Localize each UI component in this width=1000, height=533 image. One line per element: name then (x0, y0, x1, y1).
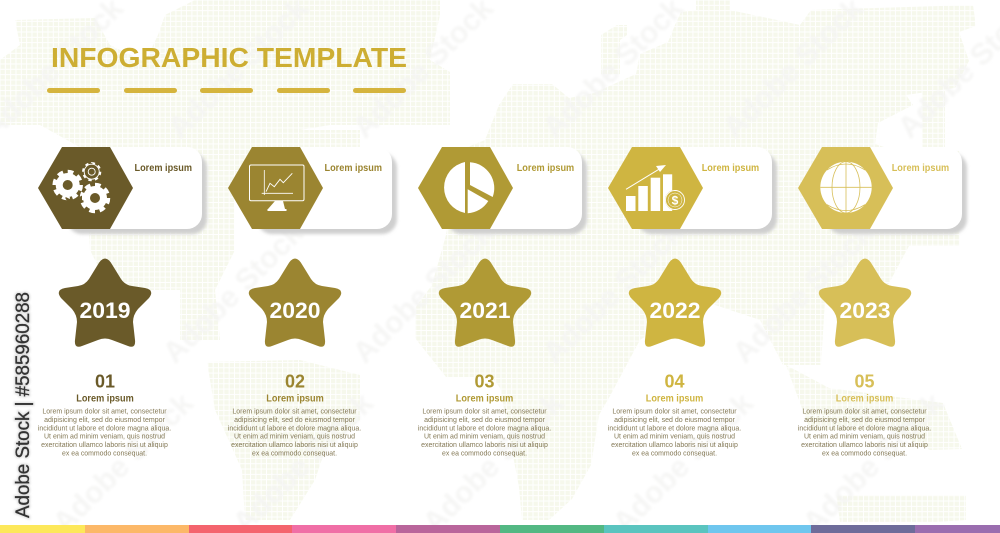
text block 03: Lorem ipsum dolor sit amet, consectetur (422, 406, 547, 416)
Adobe Stock vertical label: Adobe Stock | #585960288 (13, 292, 34, 518)
star: 2022 (629, 258, 721, 347)
text block 01: Lorem ipsum (76, 392, 134, 404)
diagonal watermarks: Adobe Stock (727, 217, 880, 370)
text block 04: exercitation ullamco laboris nisi ut aliquip (611, 440, 738, 449)
diagonal watermarks: Adobe Stock (157, 217, 310, 370)
icon: globe (820, 162, 872, 213)
text block 02: ex ea commodo consequat. (252, 448, 337, 458)
text block 03: Lorem ipsum (456, 392, 513, 404)
text block 04: adipisicing elit, sed do eiusmod tempor (614, 415, 735, 424)
card label: Lorem ipsum (892, 162, 949, 174)
card label: Lorem ipsum (134, 162, 192, 174)
card label: Lorem ipsum (324, 162, 382, 174)
text block 02: Lorem ipsum dolor sit amet, consectetur (232, 406, 357, 416)
text block 03: incididunt ut labore et dolore magna aliqua. (418, 423, 551, 432)
text block 02 (228, 370, 361, 458)
text block 04: Lorem ipsum dolor sit amet, consectetur (612, 406, 737, 416)
title dashes (47, 88, 406, 93)
text block 05: 05 (854, 370, 874, 392)
text block 01: Lorem ipsum dolor sit amet, consectetur (42, 406, 167, 416)
card label: Lorem ipsum (702, 162, 759, 174)
panel: card 4 (608, 147, 777, 234)
text block 04: Lorem ipsum (646, 392, 703, 404)
bottom colour bar (0, 525, 1000, 533)
text block 03: ex ea commodo consequat. (442, 448, 527, 458)
text block 05: exercitation ullamco laboris nisi ut aliquip (801, 440, 928, 449)
star: 2019: 2019 (80, 298, 130, 323)
icon: growth bars (626, 165, 685, 211)
text block 05: Lorem ipsum (836, 392, 893, 404)
text block 03 (418, 370, 551, 458)
text block 01: incididunt ut labore et dolore magna aliqua. (38, 423, 171, 432)
text block 02: 02 (285, 370, 305, 392)
star: 2020: 2020 (270, 298, 320, 323)
star: 2021 (439, 258, 531, 347)
text block 04: Ut enim ad minim veniam, quis nostrud (614, 432, 735, 441)
text block 05: Ut enim ad minim veniam, quis nostrud (804, 432, 925, 441)
diagonal watermarks: Adobe Stock (347, 217, 500, 370)
text block 05: ex ea commodo consequat. (822, 448, 907, 458)
star: 2020 (249, 258, 341, 347)
text block 02: Ut enim ad minim veniam, quis nostrud (234, 432, 355, 441)
star: 2021: 2021 (460, 298, 510, 323)
Adobe Stock vertical label: Adobe Stock | #585960288 (13, 292, 34, 518)
text block 03: adipisicing elit, sed do eiusmod tempor (424, 415, 545, 424)
card label: Lorem ipsum (517, 162, 574, 174)
text block 01: exercitation ullamco laboris nisi ut aliquip (41, 440, 168, 449)
text block 03: exercitation ullamco laboris nisi ut aliquip (421, 440, 548, 449)
star: 2022: 2022 (650, 298, 700, 323)
text block 05: incididunt ut labore et dolore magna aliqua. (798, 423, 931, 432)
text block 05: Lorem ipsum dolor sit amet, consectetur (802, 406, 927, 416)
text block 02: exercitation ullamco laboris nisi ut aliquip (231, 440, 358, 449)
text block 01: 01 (95, 370, 115, 392)
panel: card 5 (798, 147, 967, 234)
text block 04 (608, 370, 741, 458)
text block 01: ex ea commodo consequat. (62, 448, 147, 458)
text block 02: Lorem ipsum (266, 392, 324, 404)
panel: card 2 (228, 147, 397, 234)
text block 04: ex ea commodo consequat. (632, 448, 717, 458)
text block 01: adipisicing elit, sed do eiusmod tempor (44, 415, 165, 424)
text block 02: adipisicing elit, sed do eiusmod tempor (234, 415, 355, 424)
icon: monitor chart (250, 165, 304, 211)
icon: pie chart (444, 162, 494, 213)
diagonal watermarks: Adobe Stock (537, 217, 690, 370)
text block 05 (798, 370, 931, 458)
text block 03: 03 (474, 370, 494, 392)
icon: growth bars: $ (672, 194, 679, 208)
text block 01 (38, 370, 171, 458)
panel: card 1 (38, 147, 207, 234)
text block 05: adipisicing elit, sed do eiusmod tempor (804, 415, 925, 424)
text block 04: 04 (664, 370, 685, 392)
star: 2019 (59, 258, 151, 347)
text block 02: incididunt ut labore et dolore magna aliqua. (228, 423, 361, 432)
title: INFOGRAPHIC TEMPLATE (51, 42, 407, 73)
star: 2023: 2023 (840, 298, 890, 323)
text block 03: Ut enim ad minim veniam, quis nostrud (424, 432, 545, 441)
star: 2023 (819, 258, 911, 347)
text block 01: Ut enim ad minim veniam, quis nostrud (44, 432, 165, 441)
panel: card 3 (418, 147, 587, 234)
text block 04: incididunt ut labore et dolore magna aliqua. (608, 423, 741, 432)
icon: gears (55, 163, 108, 211)
